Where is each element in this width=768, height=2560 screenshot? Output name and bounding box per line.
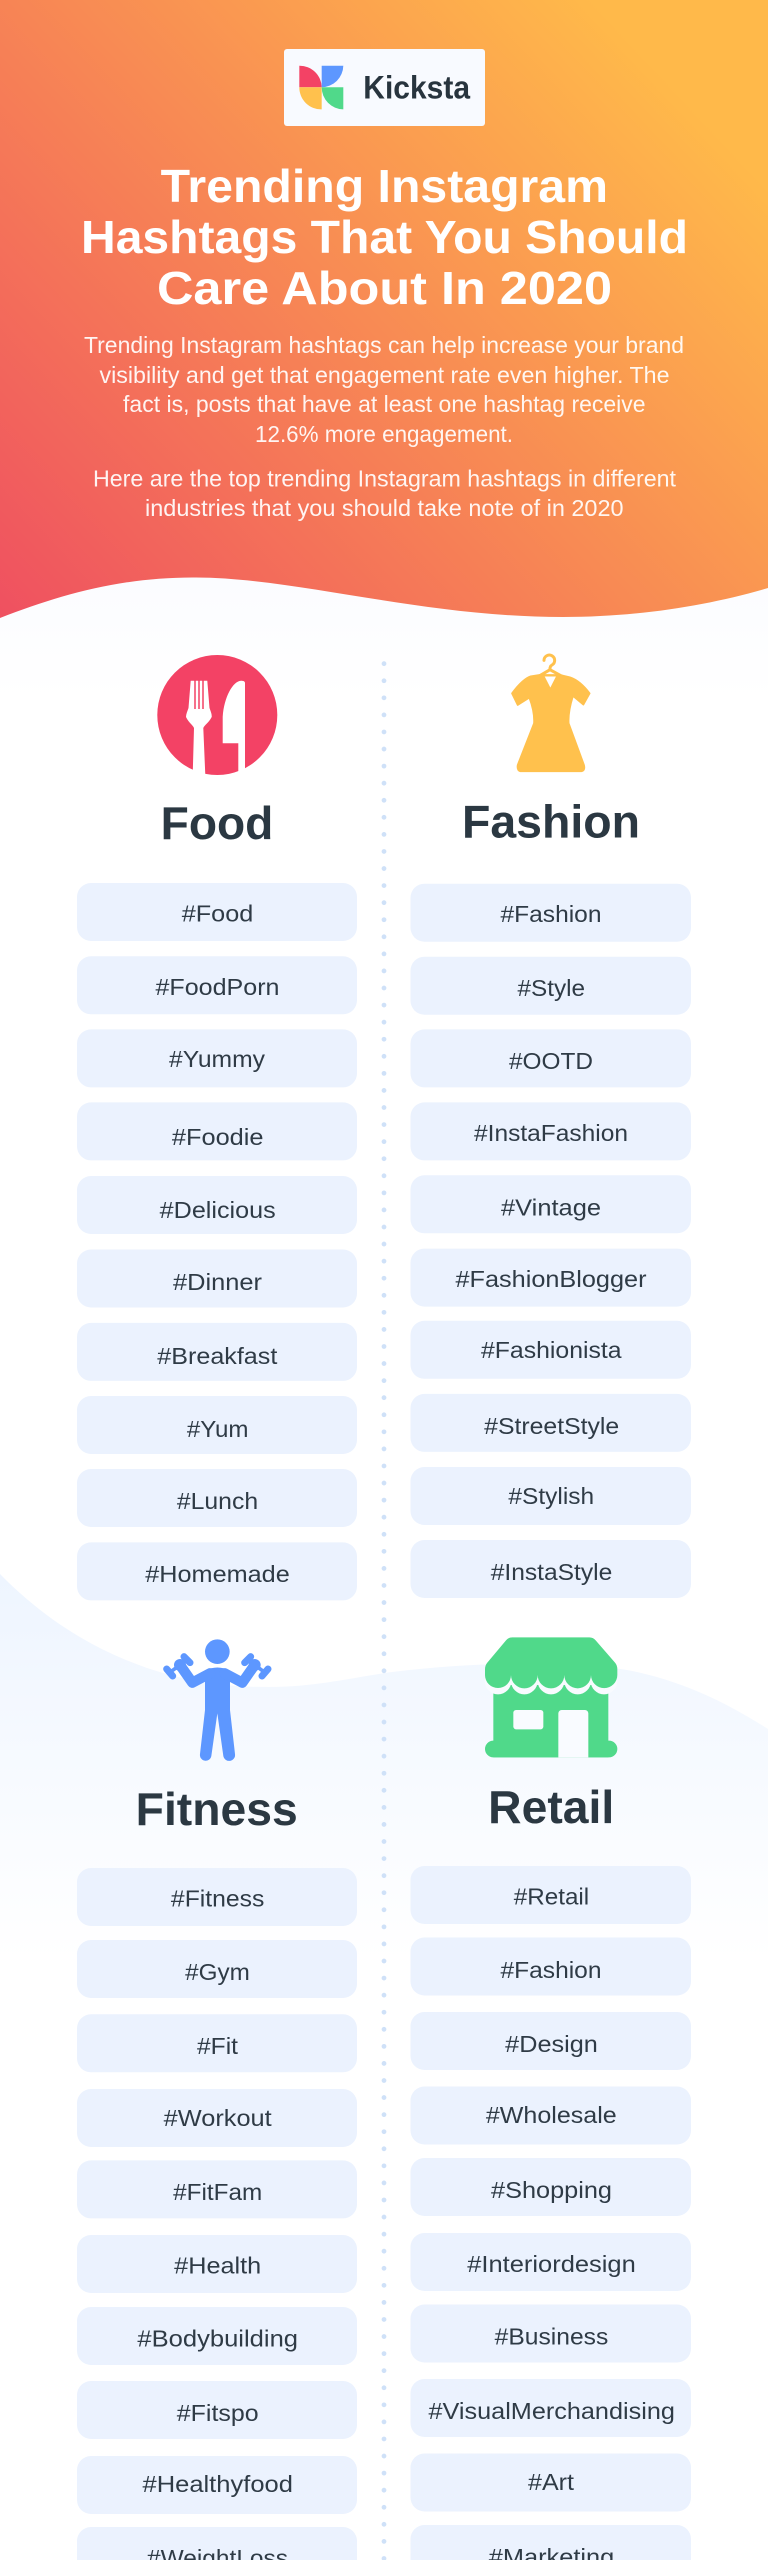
list: food hashtags: #Food xyxy=(182,901,253,927)
list: fashion hashtags: #OOTD xyxy=(509,1048,593,1074)
icon: Kicksta pinwheel mark xyxy=(299,66,343,109)
heading: Fitness: Fitness xyxy=(136,1783,298,1835)
title xyxy=(81,160,688,314)
panel: fashion xyxy=(410,655,691,1598)
list: fitness hashtags: #Fitness xyxy=(171,1886,264,1912)
list: fitness hashtags: #Gym xyxy=(185,1959,250,1985)
list: retail hashtags: #Business xyxy=(495,2324,608,2350)
list: fashion hashtags: #InstaStyle xyxy=(491,1559,612,1585)
list: retail hashtags: #Retail xyxy=(514,1884,589,1910)
intro paragraph: visibility and get that engagement rate even higher. The xyxy=(100,362,670,388)
list: retail hashtags: #VisualMerchandising xyxy=(428,2398,675,2424)
panel: retail xyxy=(410,1637,691,2560)
icon: person lifting dumbbells xyxy=(167,1639,268,1761)
list: fitness hashtags: #Health xyxy=(174,2252,261,2278)
icon: storefront xyxy=(485,1637,617,1757)
list: food hashtags: #Yummy xyxy=(169,1046,266,1072)
lead-in paragraph: Here are the top trending Instagram hashtags in different xyxy=(93,466,677,492)
logo wordmark: Kicksta xyxy=(363,69,470,105)
intro paragraph: Trending Instagram hashtags can help increase your brand xyxy=(84,332,684,358)
heading: Food: Food xyxy=(161,797,273,849)
list: fashion hashtags: #InstaFashion xyxy=(474,1120,628,1146)
list: food hashtags: #Lunch xyxy=(177,1488,258,1514)
lower pale blue wave background xyxy=(0,1574,768,1960)
list: fitness hashtags: #Workout xyxy=(164,2105,272,2131)
list: retail hashtags: #Wholesale xyxy=(486,2102,617,2128)
list: retail hashtags: #Design xyxy=(505,2031,598,2057)
list: retail hashtags: #Fashion xyxy=(500,1957,602,1983)
list: fashion hashtags: #StreetStyle xyxy=(484,1413,619,1439)
icon: fork and knife xyxy=(157,655,277,775)
title: Hashtags That You Should xyxy=(81,211,688,263)
list: fitness hashtags: #Healthyfood xyxy=(142,2471,293,2497)
list: fashion hashtags: #Stylish xyxy=(508,1483,594,1509)
list: food hashtags xyxy=(77,883,357,1600)
list: food hashtags: #Breakfast xyxy=(157,1343,278,1369)
list: food hashtags: #Yum xyxy=(187,1416,249,1442)
list: fashion hashtags xyxy=(410,884,691,1598)
icon: dress on hanger xyxy=(512,655,590,771)
header gradient background xyxy=(0,0,768,625)
heading: Retail: Retail xyxy=(488,1781,614,1833)
list: fashion hashtags: #Fashion xyxy=(500,901,602,927)
panel: food xyxy=(77,655,357,1600)
list: fashion hashtags: #FashionBlogger xyxy=(456,1266,647,1292)
list: fashion hashtags: #Vintage xyxy=(501,1194,601,1220)
intro paragraph: 12.6% more engagement. xyxy=(255,421,513,447)
list: fitness hashtags xyxy=(77,1868,357,2560)
list: retail hashtags: #Interiordesign xyxy=(467,2251,636,2277)
list: retail hashtags: #Art xyxy=(528,2469,575,2495)
lead-in paragraph xyxy=(93,466,677,521)
list: fitness hashtags: #Fitspo xyxy=(177,2400,259,2426)
list: retail hashtags: #Shopping xyxy=(491,2177,612,2203)
list: food hashtags: #Foodie xyxy=(172,1124,264,1150)
panel: fitness xyxy=(77,1639,357,2560)
intro paragraph: fact is, posts that have at least one hashtag receive xyxy=(123,391,646,417)
list: food hashtags: #Dinner xyxy=(173,1269,262,1295)
header white wave xyxy=(0,577,768,700)
list: fitness hashtags: #FitFam xyxy=(173,2179,262,2205)
title: Care About In 2020 xyxy=(157,262,612,314)
logo badge xyxy=(284,49,485,126)
list: fashion hashtags: #Fashionista xyxy=(481,1337,622,1363)
list: fashion hashtags: #Style xyxy=(518,975,585,1001)
list: food hashtags: #Delicious xyxy=(160,1197,276,1223)
title: Trending Instagram xyxy=(161,160,608,212)
list: fitness hashtags: #Fit xyxy=(197,2033,239,2059)
heading: Fashion: Fashion xyxy=(462,796,640,848)
list: retail hashtags xyxy=(410,1866,691,2560)
dotted centre divider xyxy=(382,664,386,2560)
lead-in paragraph: industries that you should take note of in 2020 xyxy=(145,495,624,521)
list: fitness hashtags: #Bodybuilding xyxy=(137,2326,298,2352)
list: food hashtags: #Homemade xyxy=(145,1561,290,1587)
list: food hashtags: #FoodPorn xyxy=(156,974,280,1000)
intro paragraph xyxy=(84,332,684,447)
